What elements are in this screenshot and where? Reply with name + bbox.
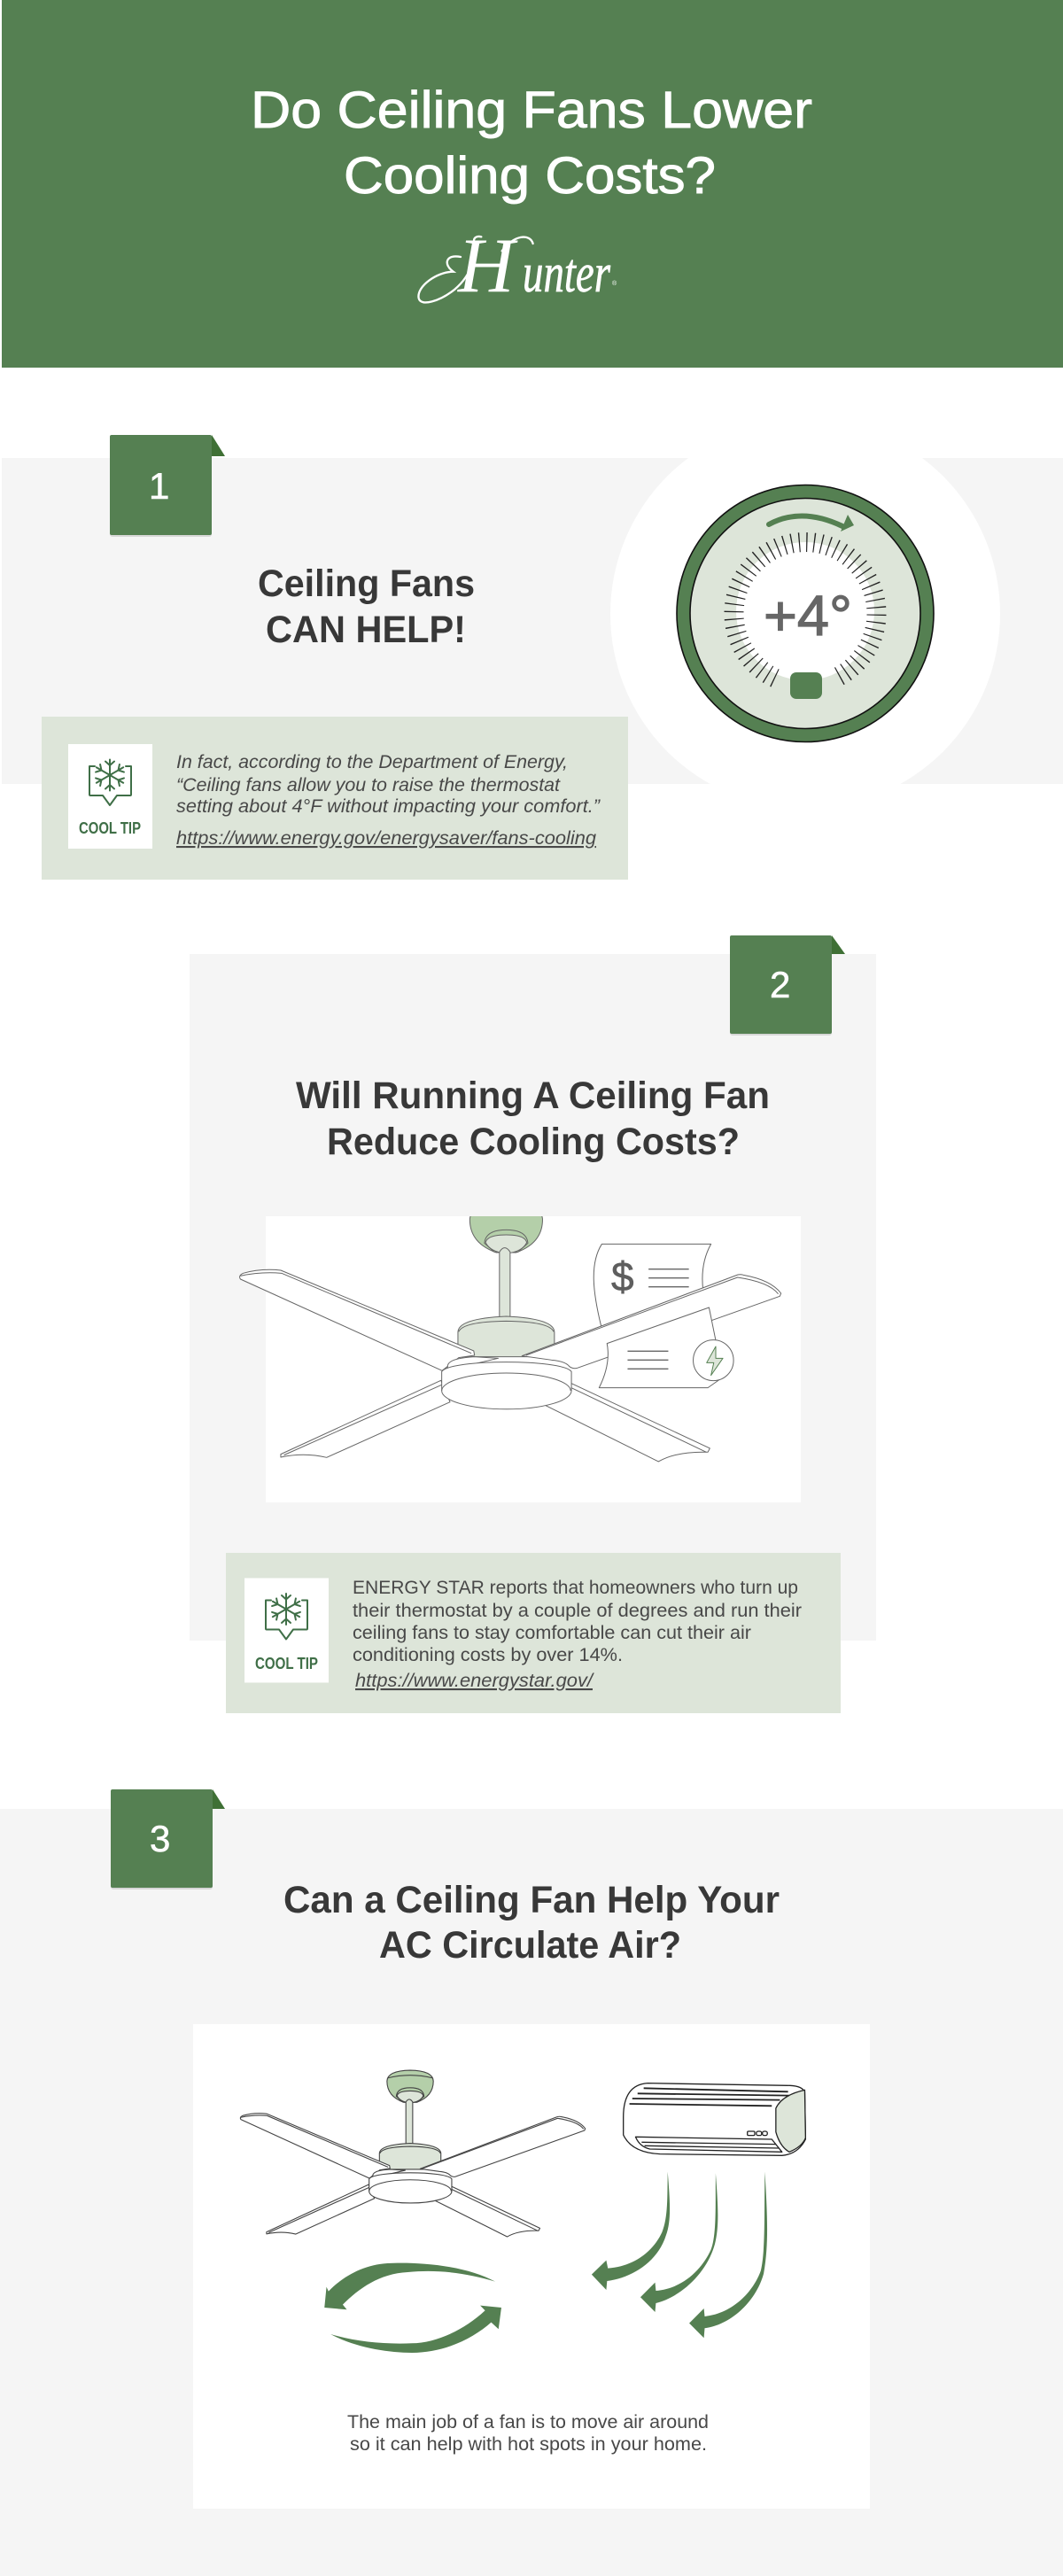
logo: Hunter: H	[457, 223, 518, 309]
bill: dollar	[594, 1244, 712, 1326]
arrows: fan circulation	[324, 2263, 501, 2353]
icon: cool tip snowflake	[68, 744, 152, 849]
icon: cool tip snowflake	[244, 1579, 329, 1683]
title	[251, 81, 812, 205]
callout: cool tip 2: COOL TIP	[255, 1655, 318, 1672]
tip text: setting about 4°F without impacting your comfort.”	[176, 796, 601, 817]
step badge 3	[111, 1789, 225, 1889]
tip text: ceiling fans to stay comfortable can cut their air	[353, 1623, 751, 1643]
dollar sign: $	[611, 1253, 634, 1300]
tip text: ENERGY STAR reports that homeowners who turn up	[353, 1578, 798, 1598]
callout: cool tip 1: COOL TIP	[79, 819, 141, 837]
tip text: https://www.energystar.gov/	[355, 1671, 594, 1691]
bill: energy	[599, 1307, 733, 1388]
panel: section 2 background	[190, 954, 876, 1641]
panel: section 1 background	[2, 458, 1063, 784]
callout: cool tip 2	[226, 1553, 841, 1713]
heading: Will running a ceiling fan reduce cooling costs: Will Running A Ceiling Fan	[296, 1075, 770, 1117]
arrows: AC airflow	[592, 2172, 767, 2338]
tip text: “Ceiling fans allow you to raise the thermostat	[176, 775, 561, 795]
tip text: In fact, according to the Department of Energy,	[176, 752, 568, 772]
icon: thermostat +4 degrees	[677, 485, 934, 742]
thermostat button	[790, 672, 822, 699]
thermostat reading: +4°	[764, 584, 852, 648]
heading: Will running a ceiling fan reduce cooling costs	[296, 1075, 770, 1163]
ceiling fan	[240, 1203, 781, 1462]
tip text	[353, 1578, 802, 1691]
panel: fan and AC illustration	[193, 2024, 870, 2509]
header banner	[2, 0, 1063, 368]
tip text: their thermostat by a couple of degrees and run their	[353, 1601, 802, 1621]
title: Cooling Costs?	[344, 147, 716, 205]
tip text	[176, 752, 601, 849]
heading: Will running a ceiling fan reduce cooling costs: Reduce Cooling Costs?	[327, 1121, 740, 1163]
caption: The main job of a fan is to move air around	[347, 2412, 709, 2432]
ceiling fan	[240, 2070, 586, 2237]
heading: Can a ceiling fan help your AC circulate air: AC Circulate Air?	[379, 1924, 681, 1967]
panel: section 3 background	[0, 1809, 1063, 2576]
panel: fan and bills illustration	[240, 1203, 801, 1502]
step badge 2: 2	[770, 964, 790, 1005]
logo: Hunter	[418, 223, 617, 309]
callout: cool tip 1	[42, 717, 628, 880]
step badge 1: 1	[149, 465, 169, 507]
caption	[347, 2412, 709, 2455]
logo: Hunter: ®	[612, 280, 617, 287]
title: Do Ceiling Fans Lower	[251, 81, 812, 139]
heading: Can a ceiling fan help your AC circulate air: Can a Ceiling Fan Help Your	[283, 1879, 780, 1921]
heading: Ceiling Fans can help	[258, 563, 475, 651]
step badge 1	[110, 435, 225, 537]
heading: Can a ceiling fan help your AC circulate air	[283, 1879, 780, 1967]
heading: Ceiling Fans can help: Ceiling Fans	[258, 563, 475, 605]
caption: so it can help with hot spots in your home.	[350, 2434, 707, 2455]
white circle behind thermostat	[610, 419, 1000, 809]
air conditioner	[624, 2083, 805, 2155]
logo: Hunter: unter	[523, 244, 611, 304]
step badge 3: 3	[150, 1818, 170, 1859]
step badge 2	[730, 935, 845, 1036]
tip text: conditioning costs by over 14%.	[353, 1645, 623, 1665]
arrow: temperature up	[769, 515, 854, 531]
heading: Ceiling Fans can help: CAN HELP!	[266, 609, 466, 651]
tip text: https://www.energy.gov/energysaver/fans-cooling	[176, 828, 596, 849]
